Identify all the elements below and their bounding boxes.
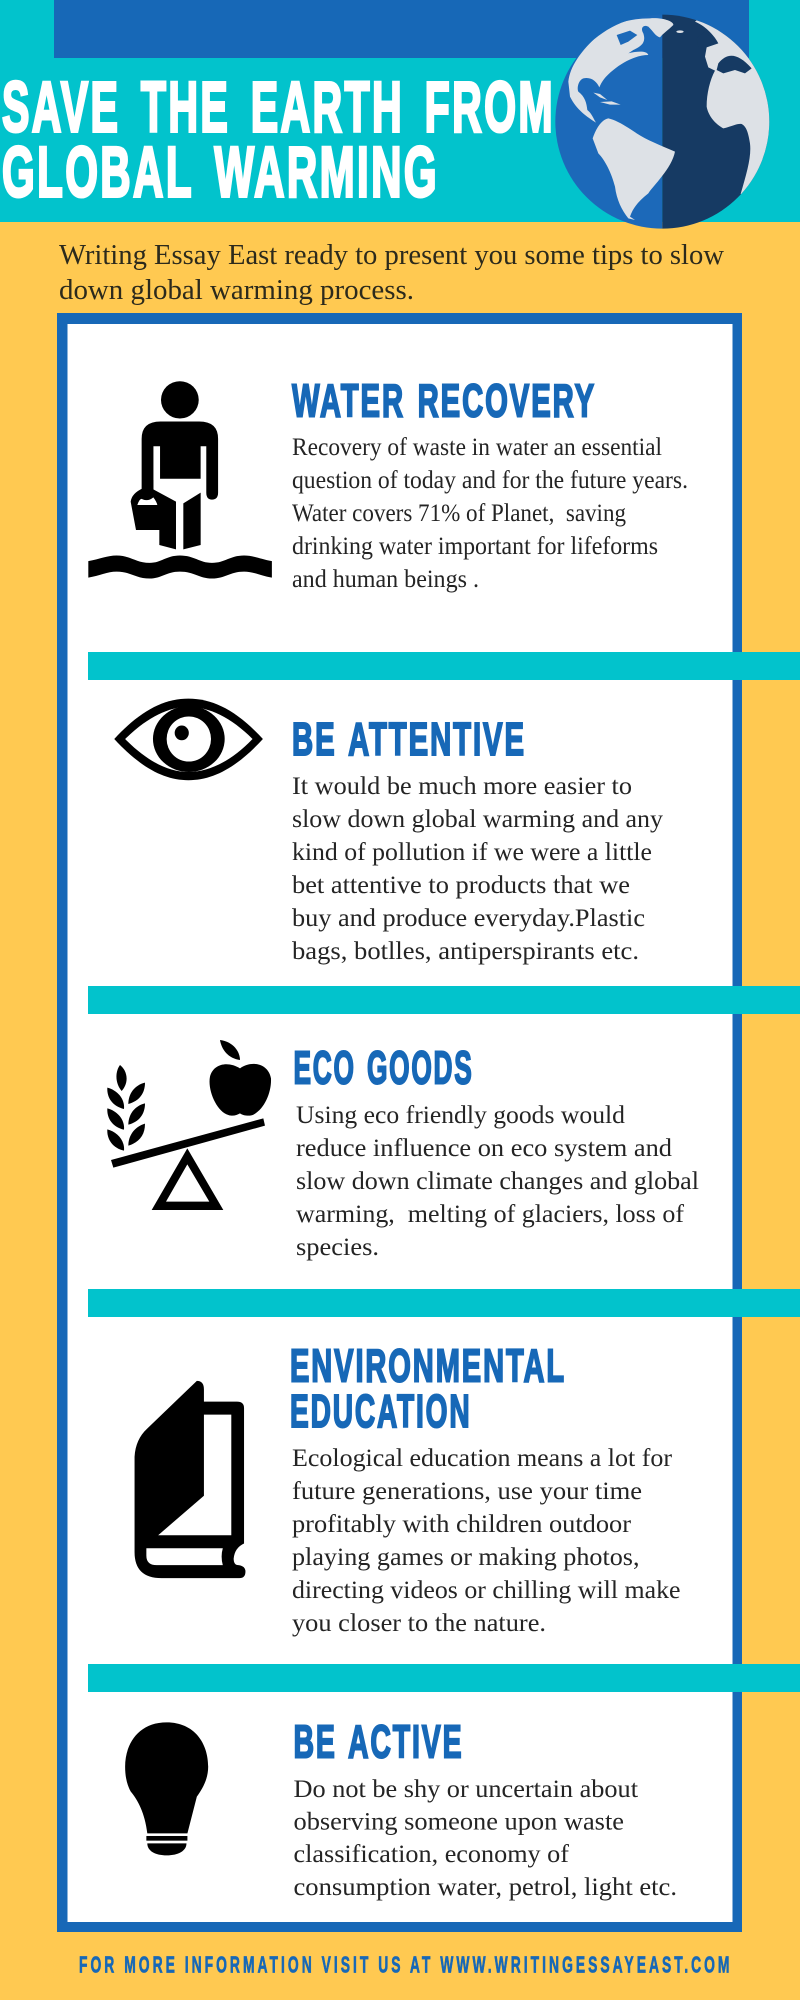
body text xyxy=(292,434,688,593)
body text: reduce influence on eco system and xyxy=(296,1135,673,1162)
icon: globe xyxy=(555,14,770,229)
body text: warming, melting of glaciers, loss of xyxy=(296,1201,685,1228)
body text: slow down climate changes and global xyxy=(296,1168,699,1195)
body text: bags, botlles, antiperspirants etc. xyxy=(292,938,639,965)
body text: kind of pollution if we were a little xyxy=(292,839,652,866)
body text xyxy=(296,1102,699,1261)
body text: buy and produce everyday.Plastic xyxy=(292,905,645,932)
body text xyxy=(292,1445,680,1637)
heading: ECO GOODS xyxy=(294,1042,474,1094)
body text: profitably with children outdoor xyxy=(292,1511,632,1538)
body text: bet attentive to products that we xyxy=(292,872,630,899)
heading: ENVIRONMENTAL xyxy=(290,1340,566,1392)
body text xyxy=(294,1776,677,1901)
intro text: Writing Essay East ready to present you some tips to slow xyxy=(59,239,724,271)
panel: eco goods xyxy=(107,1040,699,1261)
icon: light bulb xyxy=(125,1722,208,1855)
divider bars xyxy=(88,652,800,1692)
body text: Ecological education means a lot for xyxy=(292,1445,673,1472)
body text: Do not be shy or uncertain about xyxy=(294,1776,638,1803)
panel: water recovery xyxy=(88,374,688,593)
heading: WATER RECOVERY xyxy=(292,374,596,426)
intro text: down global warming process. xyxy=(59,274,414,306)
body text: and human beings . xyxy=(292,566,479,593)
panel: environmental education xyxy=(135,1340,681,1637)
body text: species. xyxy=(296,1234,379,1261)
title xyxy=(2,68,555,212)
panel: be active xyxy=(125,1716,677,1901)
icon: person in water with bucket xyxy=(88,381,272,579)
heading: BE ACTIVE xyxy=(294,1716,464,1768)
icon: balance with wheat and apple xyxy=(107,1040,271,1210)
body text: question of today and for the future years. xyxy=(292,467,688,494)
panel: tips board xyxy=(57,313,742,1932)
body text: playing games or making photos, xyxy=(292,1544,640,1571)
body text: Using eco friendly goods would xyxy=(296,1102,626,1129)
body text: future generations, use your time xyxy=(292,1478,642,1505)
heading: EDUCATION xyxy=(290,1385,472,1437)
body text: It would be much more easier to xyxy=(292,773,632,800)
panel: be attentive xyxy=(114,699,664,965)
body text: observing someone upon waste xyxy=(294,1808,624,1836)
header band xyxy=(0,0,800,222)
body text: slow down global warming and any xyxy=(292,806,664,833)
heading xyxy=(290,1340,566,1437)
icon: eye xyxy=(114,699,263,780)
body text: consumption water, petrol, light etc. xyxy=(294,1874,677,1901)
intro text xyxy=(59,239,724,306)
heading: BE ATTENTIVE xyxy=(292,713,526,765)
body text: classification, economy of xyxy=(294,1841,570,1868)
body text: Water covers 71% of Planet, saving xyxy=(292,500,626,527)
body text: you closer to the nature. xyxy=(292,1610,546,1637)
body text: Recovery of waste in water an essential xyxy=(292,434,662,461)
icon: book xyxy=(135,1381,245,1578)
body text: drinking water important for lifeforms xyxy=(292,533,658,560)
body text xyxy=(292,773,664,965)
title: GLOBAL WARMING xyxy=(2,134,439,212)
body text: directing videos or chilling will make xyxy=(292,1577,680,1604)
